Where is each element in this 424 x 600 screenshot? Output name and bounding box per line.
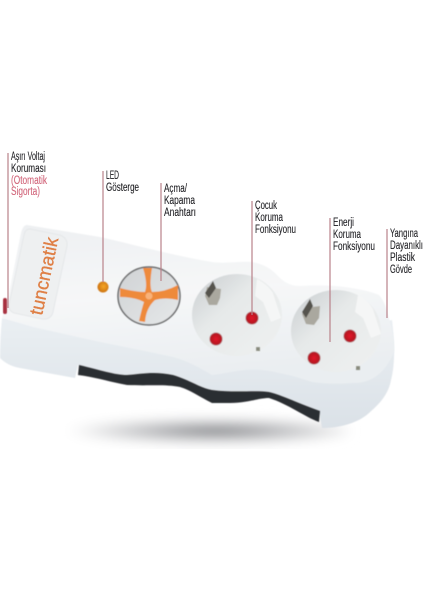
callout: overload protection: (Otomatik	[11, 175, 47, 187]
callout: child protection: Çocuk	[255, 200, 277, 212]
callout: energy protection: Koruma	[333, 229, 361, 241]
logo panel	[9, 229, 67, 319]
floor shadow	[50, 418, 350, 444]
callout: on/off switch	[161, 183, 196, 281]
callout: fire-resistant body: Plastik	[390, 252, 415, 264]
callout: overload protection: Sigorta)	[11, 186, 40, 198]
socket 1	[192, 274, 282, 356]
black rubber strip	[78, 365, 320, 422]
callout: LED indicator: LED	[106, 170, 119, 182]
power strip product	[0, 225, 394, 428]
callout: overload protection: Koruması	[11, 163, 46, 175]
callout: energy protection: Enerji	[333, 217, 354, 229]
logo text: tuncmatik	[26, 235, 63, 317]
body side wall	[0, 318, 394, 428]
overload fuse	[3, 298, 7, 314]
callout: on/off switch: Kapama	[164, 195, 195, 207]
callout: energy protection: Fonksiyonu	[333, 241, 375, 253]
callout: energy protection	[330, 217, 375, 342]
top surface	[2, 225, 394, 384]
callout: on/off switch: Açma/	[164, 183, 188, 195]
LED indicator	[98, 282, 108, 292]
callout: fire-resistant body	[387, 228, 423, 318]
infographic canvas	[0, 151, 422, 448]
callout: fire-resistant body: Gövde	[390, 264, 412, 276]
callout: on/off switch: Anahtarı	[164, 207, 196, 219]
callout: overload protection	[8, 151, 47, 308]
callout: LED indicator	[103, 170, 139, 282]
callout: child protection	[252, 200, 296, 315]
callout: LED indicator: Gösterge	[106, 182, 139, 194]
rocker switch	[118, 267, 180, 325]
socket 2	[291, 290, 381, 372]
callout: child protection: Koruma	[255, 212, 283, 224]
callout: overload protection: Aşırı Voltaj	[11, 151, 45, 163]
callout: child protection: Fonksiyonu	[255, 224, 296, 236]
